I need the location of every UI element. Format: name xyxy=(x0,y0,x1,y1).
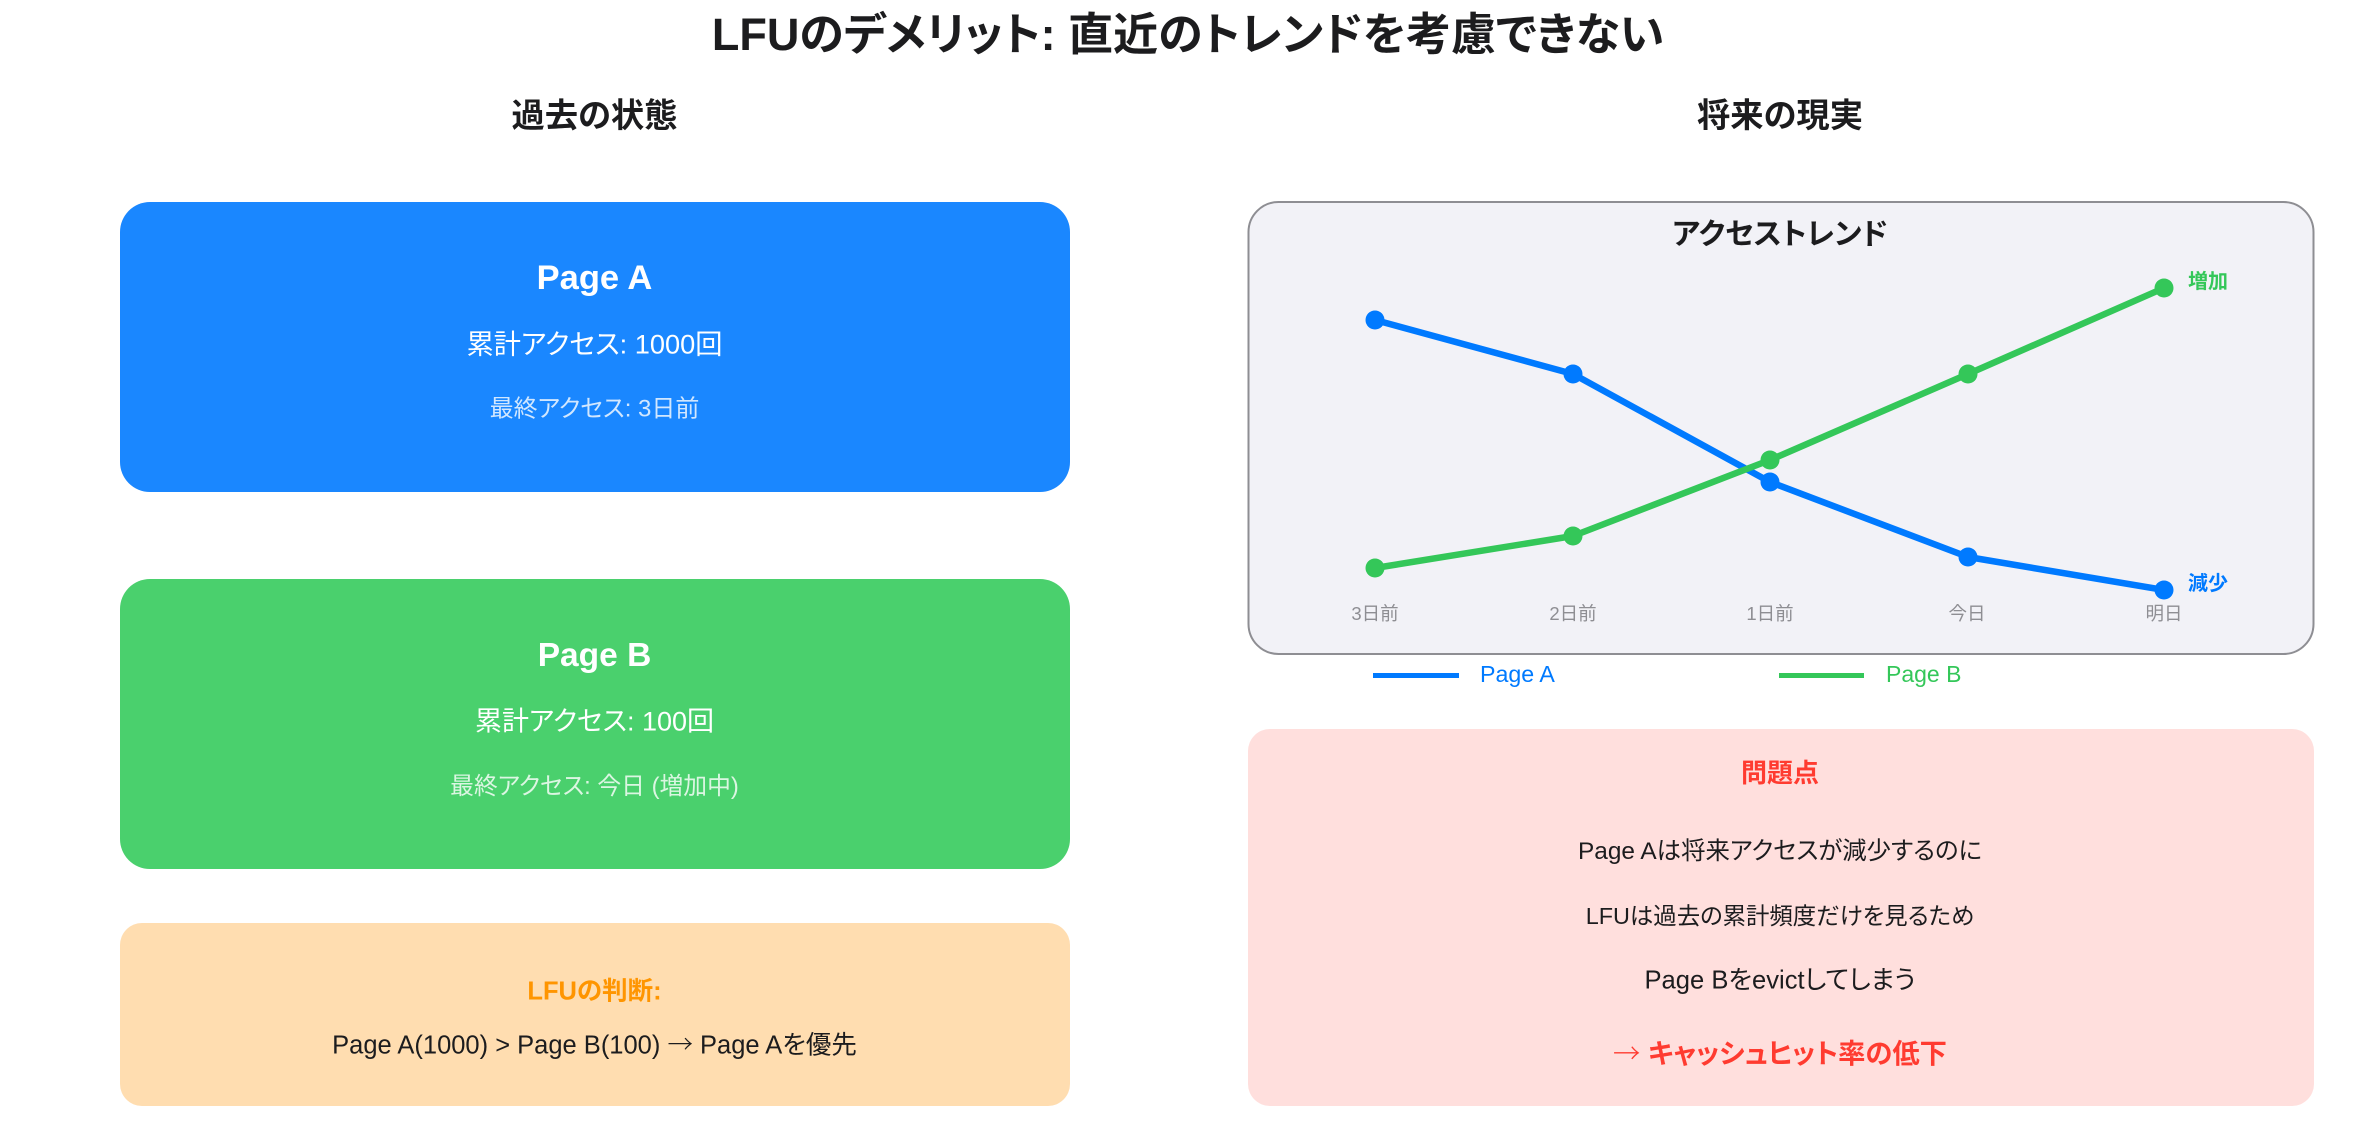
x axis labels: 明日 xyxy=(2145,603,2183,624)
Page B name: Page B xyxy=(538,637,651,674)
panel: Page B card xyxy=(120,579,1070,869)
legend xyxy=(1373,661,1961,687)
problem heading: 問題点 xyxy=(1741,758,1819,788)
panel: LFU decision xyxy=(120,923,1070,1106)
panel: Page A card xyxy=(120,202,1070,492)
Page A total accesses: 累計アクセス: 1000回 xyxy=(467,328,722,360)
Page A last access: 最終アクセス: 3日前 xyxy=(490,396,699,422)
x axis labels: 1日前 xyxy=(1746,603,1794,624)
problem line 3: Page Bをevictしてしまう xyxy=(1644,966,1916,994)
x axis labels xyxy=(1351,603,2183,624)
x axis labels: 3日前 xyxy=(1351,603,1399,624)
panel: problem xyxy=(1248,729,2314,1106)
Page B total accesses: 累計アクセス: 100回 xyxy=(475,706,714,736)
conclusion: → キャッシュヒット率の低下 xyxy=(1613,1031,1947,1071)
heading: past state: 過去の状態 xyxy=(511,98,678,135)
problem line 2: LFUは過去の累計頻度だけを見るため xyxy=(1586,903,1974,929)
x axis labels: 今日 xyxy=(1948,603,1986,624)
Page A name: Page A xyxy=(537,259,652,297)
chart title: アクセストレンド xyxy=(1672,218,1888,251)
decision text: Page A(1000) > Page B(100) → Page Aを優先 xyxy=(332,1024,857,1062)
problem line 1: Page Aは将来アクセスが減少するのに xyxy=(1578,838,1982,865)
heading: future reality: 将来の現実 xyxy=(1697,98,1863,135)
panel: access trend chart xyxy=(1248,202,2314,654)
legend: Page B: Page B xyxy=(1886,661,1961,687)
label: increase: 増加 xyxy=(2188,270,2228,293)
Page B last access: 最終アクセス: 今日 (増加中) xyxy=(450,773,739,800)
legend: Page A: Page A xyxy=(1480,661,1555,687)
title: LFUのデメリット: 直近のトレンドを考慮できない xyxy=(712,9,1664,60)
x axis labels: 2日前 xyxy=(1549,603,1597,624)
decision heading: LFUの判断: xyxy=(527,978,662,1006)
line: Page A xyxy=(1366,310,2174,600)
line: Page B xyxy=(1366,278,2174,578)
label: decrease: 減少 xyxy=(2188,571,2228,595)
